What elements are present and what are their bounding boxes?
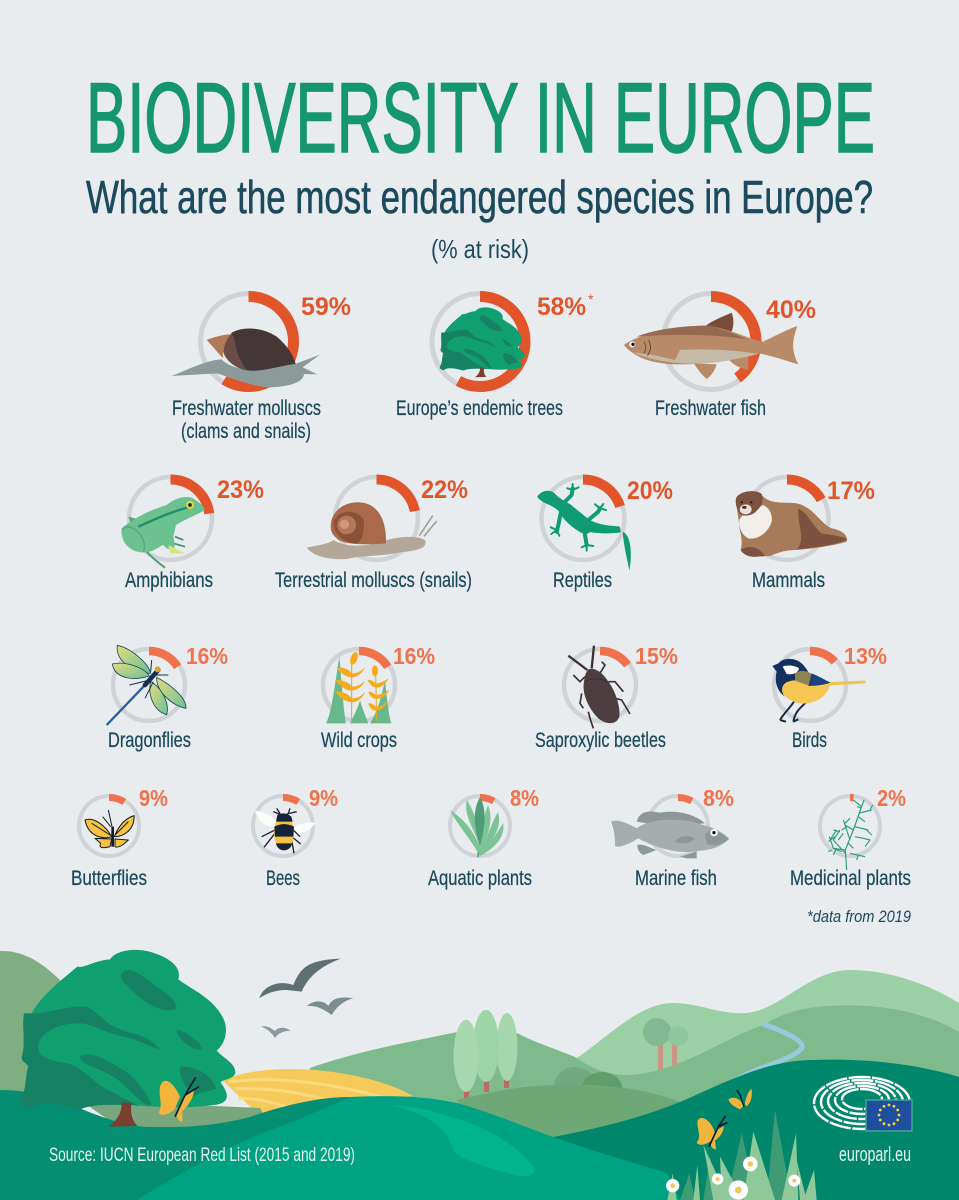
percentage: 58% [537, 293, 586, 321]
website: europarl.eu [839, 1144, 911, 1166]
percentage: 16% [393, 643, 435, 669]
label: Europe’s endemic trees [396, 397, 563, 420]
grass and flowers [666, 1110, 817, 1200]
ring chart: 8% [450, 796, 510, 856]
unit note: (% at risk) [431, 234, 529, 264]
label: Reptiles [553, 569, 612, 592]
icon: butterfly [85, 810, 134, 848]
icon: marine fish [611, 812, 729, 858]
label: Butterflies [71, 867, 147, 890]
middle hills [300, 1005, 959, 1140]
icon: medicinal plant [828, 800, 873, 870]
ring chart: 22% [335, 477, 418, 560]
panel: freshwater fish [624, 294, 816, 420]
percentage: 8% [510, 785, 539, 811]
percentage: 40% [766, 296, 816, 324]
icon: bee [255, 808, 316, 853]
ring chart: 40% [663, 294, 759, 390]
ring chart: 58% [432, 294, 528, 390]
landscape illustration [0, 950, 959, 1200]
icon: otter [736, 491, 847, 557]
percentage: 13% [844, 643, 887, 669]
river [732, 1024, 802, 1083]
percentage: 22% [421, 476, 468, 504]
label: Aquatic plants [428, 867, 532, 890]
panel: marine fish [611, 785, 734, 890]
front hill [0, 1090, 680, 1200]
percentage: 16% [186, 643, 228, 669]
ring chart: 20% [542, 477, 624, 560]
asterisk: * [588, 291, 594, 307]
far light hills [577, 970, 959, 1110]
far left hill [0, 951, 70, 1100]
label: Medicinal plants [790, 867, 911, 890]
panel: butterflies [71, 785, 168, 890]
percentage: 59% [301, 293, 351, 321]
label: Wild crops [321, 729, 397, 752]
butterfly on tree [159, 1077, 199, 1122]
icon: aquatic plant [450, 797, 503, 857]
panel: mammals [736, 477, 875, 592]
ring chart: 8% [648, 796, 708, 856]
ring chart: 16% [323, 649, 395, 721]
ring chart: 23% [129, 477, 212, 560]
label: Freshwater molluscs [172, 397, 321, 420]
tree [20, 950, 235, 1127]
icon: beetle [568, 646, 630, 728]
dark teal hill [553, 1060, 959, 1200]
tall trees [454, 1010, 518, 1098]
panel: dragonflies [107, 643, 228, 752]
panel: wild crops [321, 643, 435, 752]
label: Mammals [752, 569, 825, 592]
panel: bees [253, 785, 338, 890]
panel: terrestrial molluscs [275, 476, 472, 592]
ring chart: 9% [253, 796, 313, 856]
panel: freshwater molluscs [172, 293, 351, 443]
label: Bees [266, 867, 300, 890]
percentage: 17% [827, 477, 875, 505]
ring chart: 9% [79, 796, 139, 856]
icon: lizard [539, 484, 631, 571]
label: Terrestrial molluscs (snails) [275, 569, 472, 592]
percentage: 9% [139, 785, 168, 811]
panel: reptiles [539, 477, 673, 592]
percentage: 9% [309, 785, 338, 811]
label: Amphibians [125, 569, 213, 592]
logo: European Parliament hemicycle and EU flag [814, 1077, 912, 1131]
icon: water snail [172, 328, 320, 387]
icon: frog [121, 497, 205, 568]
label: Saproxylic beetles [535, 729, 666, 752]
icon: snail [307, 502, 437, 559]
panel: aquatic plants [428, 785, 539, 890]
foreground sage [80, 1100, 270, 1135]
percentage: 8% [703, 785, 734, 811]
darker left ground [0, 1090, 350, 1200]
near hill [457, 1084, 680, 1137]
panel: saproxylic beetles [535, 643, 678, 752]
percentage: 2% [877, 785, 906, 811]
percentage: 20% [627, 477, 673, 505]
percentage: 15% [635, 643, 678, 669]
label: Marine fish [635, 867, 717, 890]
yellow field [222, 1069, 413, 1113]
birds [259, 959, 353, 1038]
label line 2: (clams and snails) [181, 420, 311, 443]
icon: tree [440, 307, 525, 377]
ring chart: 16% [113, 649, 185, 721]
panel: medicinal plants [790, 785, 911, 890]
bushes [554, 1067, 622, 1105]
ring chart: 59% [200, 294, 296, 390]
lighter hill patch [390, 1105, 535, 1176]
ring chart: 17% [746, 477, 828, 560]
panel: birds [772, 643, 887, 752]
EU flag [866, 1100, 912, 1131]
icon: great tit [772, 659, 866, 722]
icon: dragonfly [107, 645, 186, 725]
icon: wild crops [326, 651, 391, 723]
background trees [643, 1018, 688, 1071]
ring chart: 15% [564, 649, 636, 721]
ring chart: 13% [774, 649, 846, 721]
ring chart: 2% [820, 796, 880, 856]
flowers [666, 1157, 800, 1200]
butterflies [697, 1089, 752, 1149]
panel: endemic trees [396, 291, 594, 420]
label: Dragonflies [108, 729, 191, 752]
label: Birds [792, 729, 827, 752]
panel: amphibians [121, 476, 264, 592]
percentage: 23% [217, 476, 264, 504]
footnote: *data from 2019 [807, 907, 911, 926]
hemicycle [814, 1077, 910, 1129]
label: Freshwater fish [655, 397, 766, 420]
source: Source: IUCN European Red List (2015 and 2019) [49, 1144, 355, 1166]
icon: fish [624, 313, 798, 379]
